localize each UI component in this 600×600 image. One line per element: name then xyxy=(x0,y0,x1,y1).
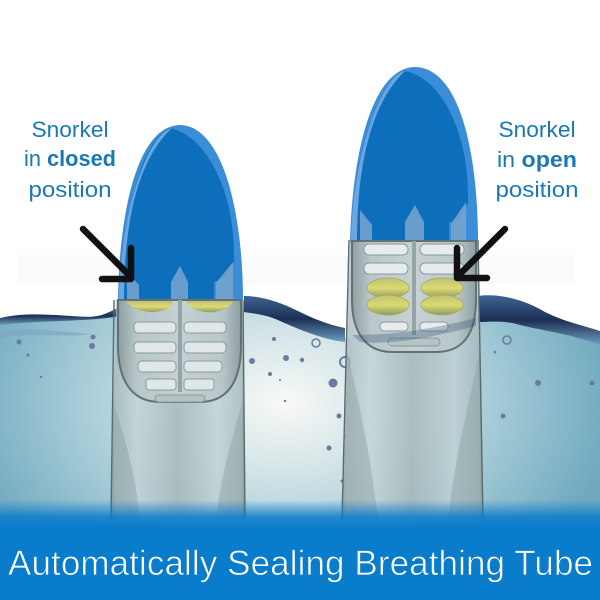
dome: closed xyxy=(118,125,243,300)
label: snorkel open: in open xyxy=(497,147,577,172)
banner title: Automatically Sealing Breathing Tube xyxy=(8,544,593,583)
bottom banner xyxy=(0,500,600,600)
label: snorkel open: Snorkel xyxy=(498,117,576,142)
closed snorkel tube xyxy=(111,125,245,520)
label: snorkel closed: position xyxy=(28,177,112,202)
dome: open xyxy=(350,67,478,242)
arrow: open xyxy=(457,229,505,278)
label: snorkel open: position xyxy=(496,177,578,202)
label: snorkel closed: in closed xyxy=(24,146,116,171)
valve window: closed xyxy=(118,300,241,402)
water surface wave xyxy=(0,295,600,345)
label: snorkel closed xyxy=(24,117,116,202)
label: snorkel closed: Snorkel xyxy=(32,117,108,142)
arrow: closed xyxy=(83,229,131,279)
valve window: open xyxy=(352,241,476,352)
label: snorkel open xyxy=(496,117,578,202)
open snorkel tube xyxy=(342,67,483,520)
tube body: open xyxy=(342,240,483,520)
tube body: closed xyxy=(111,300,245,520)
bubbles xyxy=(16,334,594,482)
